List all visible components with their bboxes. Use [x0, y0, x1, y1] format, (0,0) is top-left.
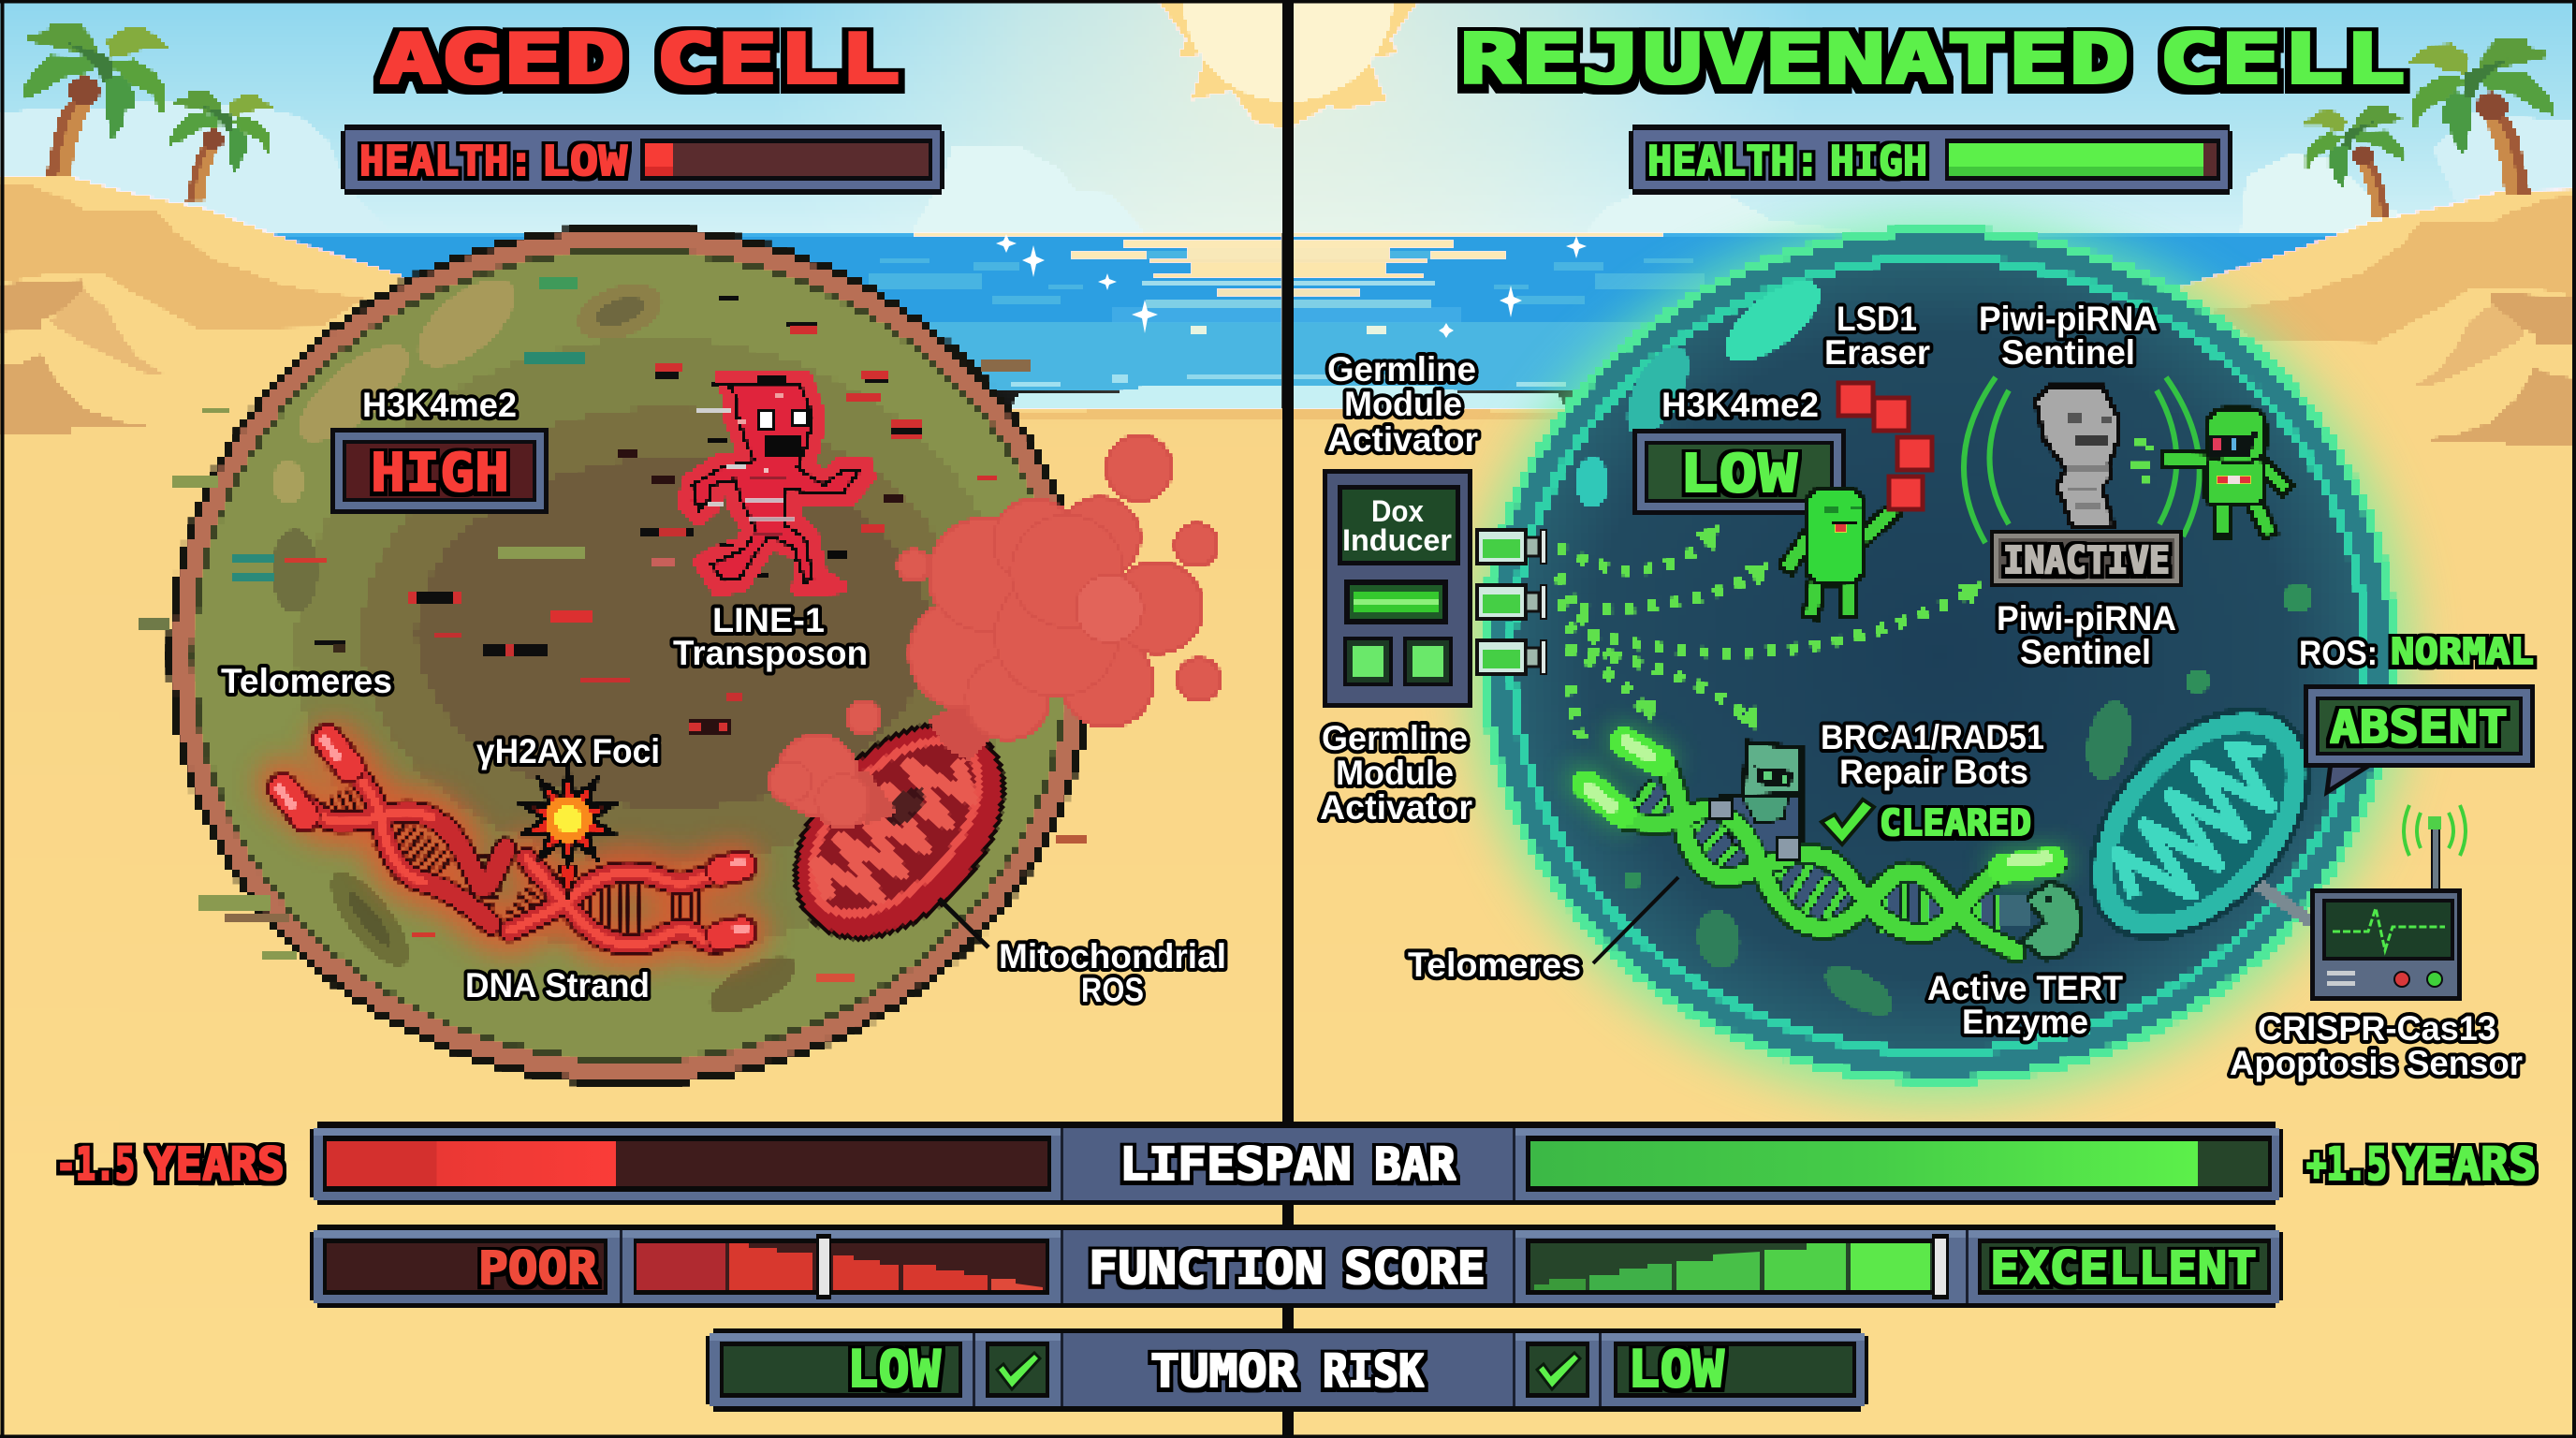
title: aged cell: CELL [655, 20, 900, 98]
health bar: low [341, 125, 944, 195]
label: H3K4me2 low: H3K4me2 [1661, 386, 1819, 424]
sea sparkles [996, 234, 1587, 338]
label: Telomeres right: Telomeres [1408, 946, 1581, 984]
label: Piwi-piRNA Sentinel bottom: Sentinel [2020, 633, 2151, 671]
value: minus 1.5 years [56, 1138, 285, 1191]
icon: syringe top [1477, 530, 1546, 564]
palm tree: left small [170, 91, 273, 201]
stat row: function score [310, 1225, 2283, 1308]
label: Germline Module Activator bottom: Module [1336, 754, 1454, 792]
palm tree: right small [2303, 107, 2406, 217]
icon: check rejuvenated [1526, 1342, 1589, 1398]
value: plus 1.5 years [2306, 1138, 2537, 1191]
label: LSD1 Eraser: Eraser [1824, 333, 1930, 372]
icon: check aged [986, 1342, 1049, 1398]
icon: LSD1 eraser bot [1790, 489, 1891, 610]
right dunes [1977, 189, 2576, 612]
label: H3K4me2: H3K4me2 [362, 386, 517, 424]
heading: lifespan bar [1120, 1138, 1456, 1191]
heading: lifespan bar: LIFESPAN [1120, 1138, 1352, 1191]
organelles [272, 264, 803, 1023]
value: low aged: LOW [847, 1340, 941, 1399]
heading: lifespan bar: BAR [1374, 1138, 1456, 1191]
screen: dox inducer [1338, 485, 1460, 565]
box: H3K4me2 high: HIGH [371, 443, 509, 504]
label: cleared: CLEARED [1880, 802, 2031, 844]
icon: LINE-1 transposon creature [683, 376, 869, 590]
label: CRISPR-Cas13 Apoptosis Sensor: CRISPR-Cas13 [2258, 1009, 2496, 1048]
label: LINE-1 Transposon: Transposon [673, 634, 868, 672]
label: BRCA1/RAD51 Repair Bots: Repair Bots [1839, 753, 2028, 791]
sand [0, 407, 2576, 1438]
value: low aged [720, 1340, 962, 1399]
health bar: high [1629, 125, 2232, 195]
chart: aged function bars [634, 1234, 1049, 1299]
icon: damaged mitochondrion [756, 686, 1043, 976]
icon: repair bot [1720, 742, 1801, 857]
icon: green DNA strand with telomeres [1583, 740, 2056, 952]
stat row: lifespan bar [310, 1122, 2283, 1205]
center divider lower [1282, 1205, 1294, 1438]
box: H3K4me2 high [330, 428, 549, 514]
label: Piwi-piRNA Sentinel top: Piwi-piRNA [1979, 300, 2158, 338]
heading: function score: SCORE [1344, 1242, 1486, 1295]
lifespan track: aged [323, 1136, 1051, 1192]
icon: yH2AX foci burst [525, 772, 611, 895]
heading: tumor risk: TUMOR [1150, 1345, 1296, 1398]
sea left half [0, 231, 1282, 407]
icon: syringe middle [1477, 585, 1546, 619]
health bar: low: LOW [541, 138, 628, 185]
label: LINE-1 Transposon: LINE-1 [712, 601, 825, 639]
panel: rejuvenated cell [1320, 218, 2535, 1102]
label: Germline Module Activator top: Activator [1327, 420, 1478, 459]
icon: DNA strand damaged [279, 740, 745, 945]
icon: mitochondrial ROS smoke cloud [770, 436, 1220, 827]
value: poor [323, 1239, 607, 1295]
label: Active TERT Enzyme [1927, 969, 2123, 1041]
icon: TERT enzyme [2001, 883, 2080, 959]
indicator tube [1344, 580, 1448, 624]
label: Mitochondrial ROS [999, 937, 1226, 1009]
center divider [1282, 0, 1294, 1122]
title: aged cell [380, 20, 900, 98]
sea right half [1294, 231, 2576, 407]
icon: erased red blocks [1838, 383, 1932, 509]
rejuvenated cell body [1480, 227, 2397, 1084]
stat row: tumor risk [706, 1328, 1868, 1412]
panel: aged cell [140, 225, 1226, 1086]
heading: function score [1089, 1242, 1486, 1295]
label: Active TERT Enzyme: Enzyme [1962, 1003, 2088, 1041]
label: yH2AX Foci: γH2AX Foci [476, 732, 660, 770]
palm tree: left big [23, 22, 168, 178]
value: plus 1.5 years: YEARS [2396, 1138, 2537, 1191]
value: minus 1.5 years: -1.5 [56, 1138, 135, 1191]
label: Active TERT Enzyme: Active TERT [1927, 969, 2123, 1007]
value: minus 1.5 years: YEARS [148, 1138, 285, 1191]
label: Mitochondrial ROS: ROS [1081, 971, 1144, 1009]
label: Piwi-piRNA Sentinel top: Sentinel [2001, 333, 2135, 372]
label: ROS normal: NORMAL [2391, 631, 2534, 672]
health bar: high: HIGH [1830, 138, 1927, 185]
icon: syringe bottom [1477, 640, 1546, 674]
label: Piwi-piRNA Sentinel bottom [1997, 599, 2176, 671]
dox particle streams [1559, 526, 1983, 751]
box: inactive: INACTIVE [2003, 539, 2170, 582]
chart: rejuvenated function bars [1526, 1234, 1949, 1299]
organelles [1576, 268, 2312, 1024]
cell glow [1466, 218, 2411, 1102]
value: plus 1.5 years: +1.5 [2306, 1138, 2387, 1191]
aged cell body [168, 225, 1093, 1086]
icon: inactive piwi-piRNA sentinel worm [2036, 387, 2117, 527]
label: LSD1 Eraser [1824, 300, 1930, 372]
palm tree: right big [2408, 38, 2553, 194]
sun [1158, 0, 1419, 129]
health bar: low: HEALTH: [359, 138, 534, 185]
icon: green sentinel robot [2132, 409, 2282, 529]
icon: apoptosis sensor monitor [2310, 805, 2466, 1001]
buttons [1345, 638, 1451, 684]
label: BRCA1/RAD51 Repair Bots: BRCA1/RAD51 [1821, 718, 2044, 756]
title: rejuvenated cell: CELL [2159, 20, 2406, 98]
label: Germline Module Activator bottom [1320, 719, 1472, 827]
icon: shield arcs [1964, 377, 2200, 543]
health bar: high: HEALTH: [1647, 138, 1820, 185]
label: Germline Module Activator bottom: Germline [1322, 719, 1468, 757]
label: DNA Strand: DNA Strand [465, 966, 650, 1005]
line: telomeres leader [1593, 877, 1678, 963]
label: LINE-1 Transposon [673, 601, 868, 672]
icon: healthy mitochondrion [2050, 670, 2349, 977]
icon: repair bot gauntlets [1709, 799, 1799, 858]
clouds [0, 101, 2576, 234]
lifespan track: rejuvenated [1526, 1136, 2272, 1192]
label: Germline Module Activator top: Module [1344, 385, 1462, 423]
label: ROS normal: ROS: [2299, 634, 2378, 672]
heading: tumor risk: RISK [1323, 1345, 1424, 1398]
box: ROS absent speech bubble: ABSENT [2330, 701, 2508, 754]
device: germline module activator [1323, 469, 1472, 708]
label: LSD1 Eraser: LSD1 [1837, 300, 1917, 338]
label: CRISPR-Cas13 Apoptosis Sensor: Apoptosis Sensor [2230, 1044, 2523, 1082]
value: excellent: EXCELLENT [1990, 1242, 2257, 1295]
title: aged cell: AGED [380, 20, 625, 98]
label: Mitochondrial ROS: Mitochondrial [999, 937, 1226, 976]
heading: tumor risk [1150, 1345, 1424, 1398]
glitch fragments [140, 278, 1088, 981]
screen: dox inducer: Inducer [1342, 523, 1452, 557]
value: low rejuvenated: LOW [1628, 1340, 1725, 1399]
box: H3K4me2 low: LOW [1679, 444, 1797, 505]
label: CRISPR-Cas13 Apoptosis Sensor [2230, 1009, 2523, 1082]
label: Piwi-piRNA Sentinel bottom: Piwi-piRNA [1997, 599, 2176, 638]
label: Piwi-piRNA Sentinel top [1979, 300, 2158, 372]
value: poor: POOR [478, 1242, 597, 1295]
label: Telomeres: Telomeres [221, 662, 392, 700]
heading: function score: FUNCTION [1089, 1242, 1324, 1295]
box: H3K4me2 low [1632, 429, 1846, 515]
title: rejuvenated cell [1459, 20, 2406, 98]
value: low rejuvenated [1614, 1340, 1856, 1399]
icon: cleared check [1822, 800, 1874, 844]
label: ROS normal [2299, 631, 2534, 672]
label: BRCA1/RAD51 Repair Bots [1821, 718, 2044, 791]
label: Germline Module Activator top [1327, 350, 1478, 459]
label: Germline Module Activator top: Germline [1327, 350, 1476, 389]
screen: dox inducer: Dox [1371, 494, 1424, 528]
line: mitochondrial ROS leader [939, 899, 988, 947]
box: ROS absent speech bubble [2304, 684, 2535, 792]
label: Germline Module Activator bottom: Activator [1320, 788, 1472, 827]
left dunes [0, 176, 599, 599]
title: rejuvenated cell: REJUVENATED [1459, 20, 2130, 98]
